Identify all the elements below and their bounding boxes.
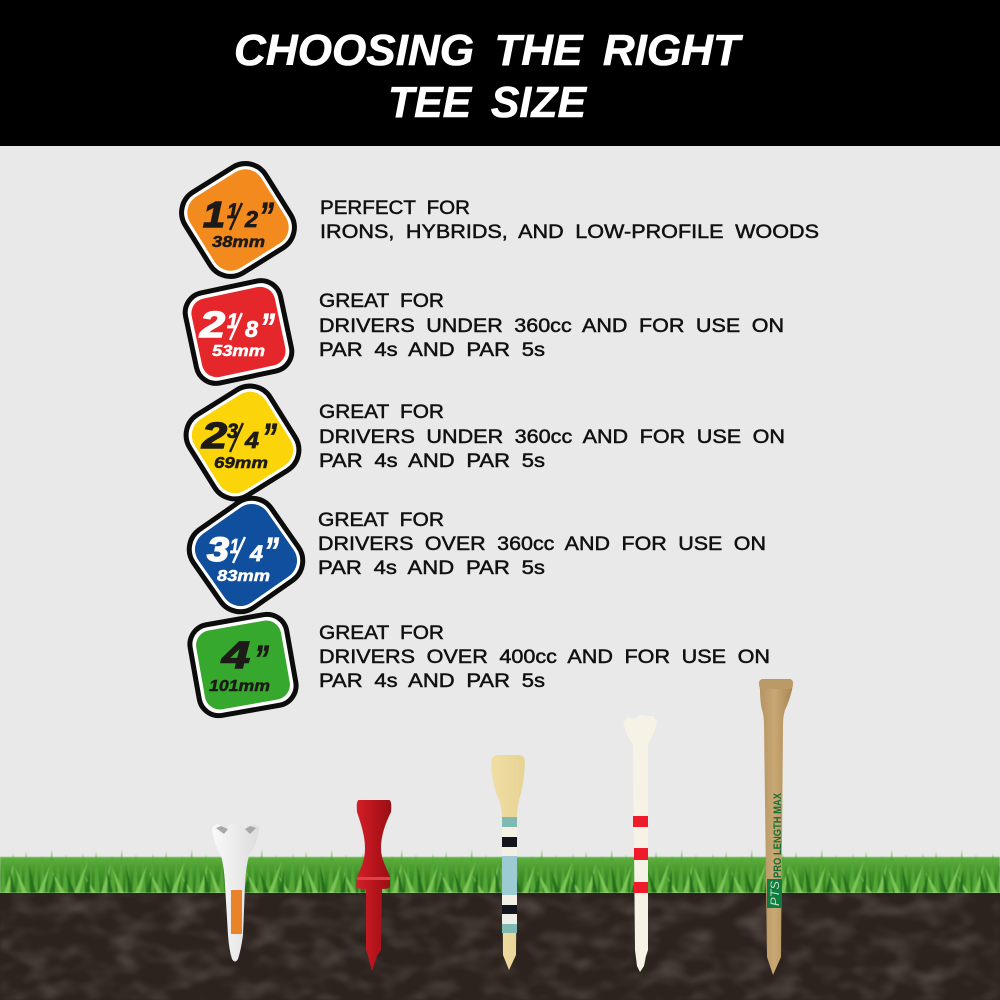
badge: 4 inch 101mm: 101mm bbox=[209, 678, 270, 695]
badge: 2 1/8 inch 53mm: 2 bbox=[199, 304, 225, 345]
badge: 1 1/2 inch 38mm: 1 bbox=[203, 194, 225, 235]
badge: 3 1/4 inch 83mm: 83mm bbox=[217, 568, 270, 585]
text: 3 1/4 inch usage bbox=[318, 509, 766, 579]
text: 2 3/4 inch usage: GREAT FOR bbox=[319, 401, 444, 423]
badge: 2 1/8 inch 53mm: ” bbox=[260, 307, 275, 349]
badge: 2 1/8 inch 53mm: 1 bbox=[227, 310, 238, 333]
badge: 2 3/4 inch 69mm: 3 bbox=[227, 420, 238, 443]
badge: 3 1/4 inch 83mm: 3 bbox=[207, 531, 229, 569]
badge: 1 1/2 inch 38mm: 1 bbox=[227, 200, 238, 223]
badge: 2 3/4 inch 69mm bbox=[177, 377, 308, 508]
text: 2 1/8 inch usage bbox=[319, 290, 784, 361]
text: 4 inch usage bbox=[319, 622, 770, 692]
title: CHOOSING THE RIGHT bbox=[234, 26, 743, 75]
text: 4 inch usage: PAR 4s AND PAR 5s bbox=[319, 670, 545, 692]
text: 1 1/2 inch usage: IRONS, HYBRIDS, AND LOW-PROFILE WOODS bbox=[320, 221, 819, 243]
text: 2 1/8 inch usage: DRIVERS UNDER 360cc AND FOR USE ON bbox=[319, 315, 784, 337]
text: 2 1/8 inch usage: GREAT FOR bbox=[319, 290, 444, 312]
text: 4 inch usage: DRIVERS OVER 400cc AND FOR USE ON bbox=[319, 646, 770, 668]
badge: 3 1/4 inch 83mm: 4 bbox=[249, 541, 263, 566]
tee: wooden PTS Pro Length Max bbox=[759, 679, 793, 975]
tee: white cup with orange band bbox=[212, 823, 259, 962]
tee: striped cream and teal bbox=[491, 755, 525, 970]
text: 2 3/4 inch usage: DRIVERS UNDER 360cc AND FOR USE ON bbox=[319, 426, 785, 448]
badge: 2 1/8 inch 53mm: 53mm bbox=[212, 343, 265, 360]
badge: 2 1/8 inch 53mm bbox=[181, 277, 296, 387]
badge: 4 inch 101mm: 4 bbox=[221, 635, 250, 677]
text: 4 inch usage: GREAT FOR bbox=[319, 622, 444, 644]
tee: wooden PTS Pro Length Max: PTS bbox=[768, 881, 782, 906]
badge: 2 3/4 inch 69mm: 2 bbox=[201, 415, 227, 456]
text: 1 1/2 inch usage: PERFECT FOR bbox=[320, 197, 470, 219]
badge: 1 1/2 inch 38mm bbox=[173, 155, 303, 285]
grass strip bbox=[0, 845, 1000, 893]
tee: wooden PTS Pro Length Max: PRO LENGTH MAX bbox=[772, 792, 784, 878]
text: 2 1/8 inch usage: PAR 4s AND PAR 5s bbox=[319, 339, 545, 361]
text: 3 1/4 inch usage: PAR 4s AND PAR 5s bbox=[318, 557, 545, 579]
title: TEE SIZE bbox=[388, 78, 588, 127]
text: 3 1/4 inch usage: GREAT FOR bbox=[318, 509, 444, 531]
badge: 3 1/4 inch 83mm bbox=[180, 489, 312, 621]
text: 2 3/4 inch usage: PAR 4s AND PAR 5s bbox=[319, 450, 545, 472]
tee: white with red stripes bbox=[623, 715, 657, 972]
badge: 2 3/4 inch 69mm: 69mm bbox=[214, 455, 268, 472]
tee: red castle bbox=[356, 800, 391, 971]
badge: 3 1/4 inch 83mm: 1 bbox=[230, 536, 239, 558]
badge: 4 inch 101mm: ” bbox=[254, 639, 269, 681]
badge: 2 3/4 inch 69mm: ” bbox=[262, 417, 277, 459]
badge: 2 1/8 inch 53mm: 8 bbox=[245, 316, 258, 342]
header band bbox=[0, 0, 1000, 146]
text: 3 1/4 inch usage: DRIVERS OVER 360cc AND FOR USE ON bbox=[318, 533, 766, 555]
badge: 2 3/4 inch 69mm: 4 bbox=[244, 427, 259, 453]
badge: 4 inch 101mm bbox=[187, 611, 299, 719]
text: 2 3/4 inch usage bbox=[319, 401, 785, 472]
title bbox=[234, 26, 743, 127]
badge: 1 1/2 inch 38mm: 38mm bbox=[212, 234, 265, 251]
badge: 1 1/2 inch 38mm: ” bbox=[259, 196, 274, 238]
badge: 3 1/4 inch 83mm: ” bbox=[264, 531, 279, 573]
badge: 1 1/2 inch 38mm: 2 bbox=[244, 206, 258, 232]
text: 1 1/2 inch usage bbox=[320, 197, 819, 243]
soil bbox=[0, 893, 1000, 1000]
